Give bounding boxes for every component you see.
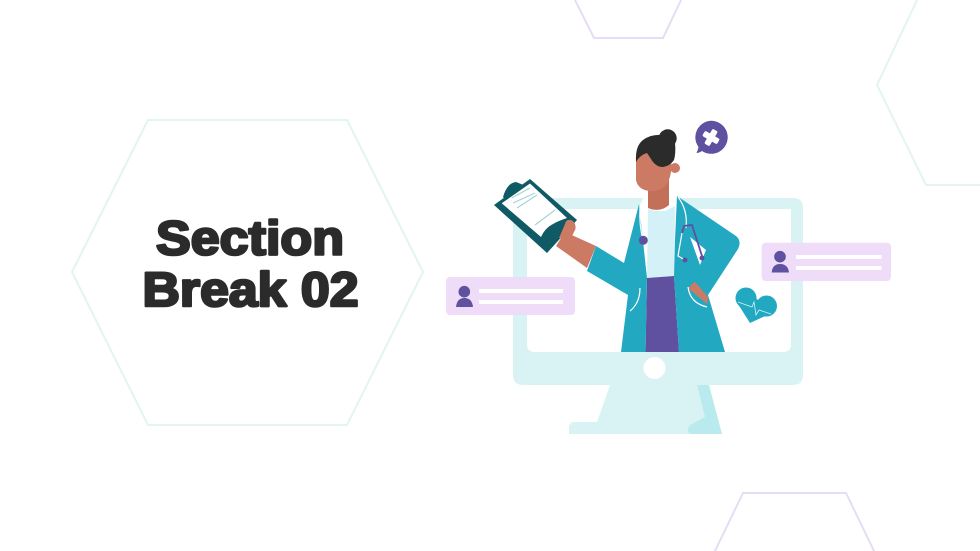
head xyxy=(636,129,680,191)
clipboard paper xyxy=(502,184,567,237)
title: Section xyxy=(156,212,344,266)
shirt xyxy=(647,206,675,278)
pocket paper xyxy=(690,237,706,265)
card lines xyxy=(479,289,563,304)
monitor screen frame xyxy=(513,198,803,385)
neck xyxy=(648,180,669,210)
hexagon: bottom purple outline xyxy=(714,493,875,551)
card: right patient xyxy=(762,243,891,281)
hexagon: right teal outline xyxy=(877,0,980,185)
white collar and undercoat xyxy=(639,195,680,277)
monitor camera dot xyxy=(644,357,666,379)
clipboard text lines xyxy=(512,188,555,225)
ear xyxy=(670,163,680,173)
doctor figure xyxy=(556,129,740,352)
monitor stand xyxy=(569,385,722,434)
title: Break 02 xyxy=(142,264,358,317)
title xyxy=(142,212,358,317)
hexagon: top purple outline xyxy=(574,0,682,38)
card lines xyxy=(796,255,882,270)
card: left patient xyxy=(446,277,575,315)
hexagon: title frame xyxy=(72,120,423,425)
arm xyxy=(556,232,596,268)
illustration: doctor in monitor xyxy=(446,121,891,434)
hair bun xyxy=(659,129,677,147)
hand on hip xyxy=(688,282,708,304)
clipboard board xyxy=(494,179,577,253)
coat right side xyxy=(674,196,740,352)
clipboard xyxy=(494,179,577,253)
person icon xyxy=(456,286,473,307)
clipboard clip xyxy=(503,182,526,205)
skirt xyxy=(646,276,679,352)
hand on clipboard xyxy=(559,220,576,240)
coat left side xyxy=(587,204,647,352)
face xyxy=(636,148,672,191)
person icon xyxy=(772,251,789,272)
hair xyxy=(636,135,675,167)
heart icon xyxy=(736,288,777,323)
speech bubble with cross xyxy=(695,121,728,154)
stethoscope xyxy=(639,197,704,262)
coat pocket lines xyxy=(630,287,707,311)
